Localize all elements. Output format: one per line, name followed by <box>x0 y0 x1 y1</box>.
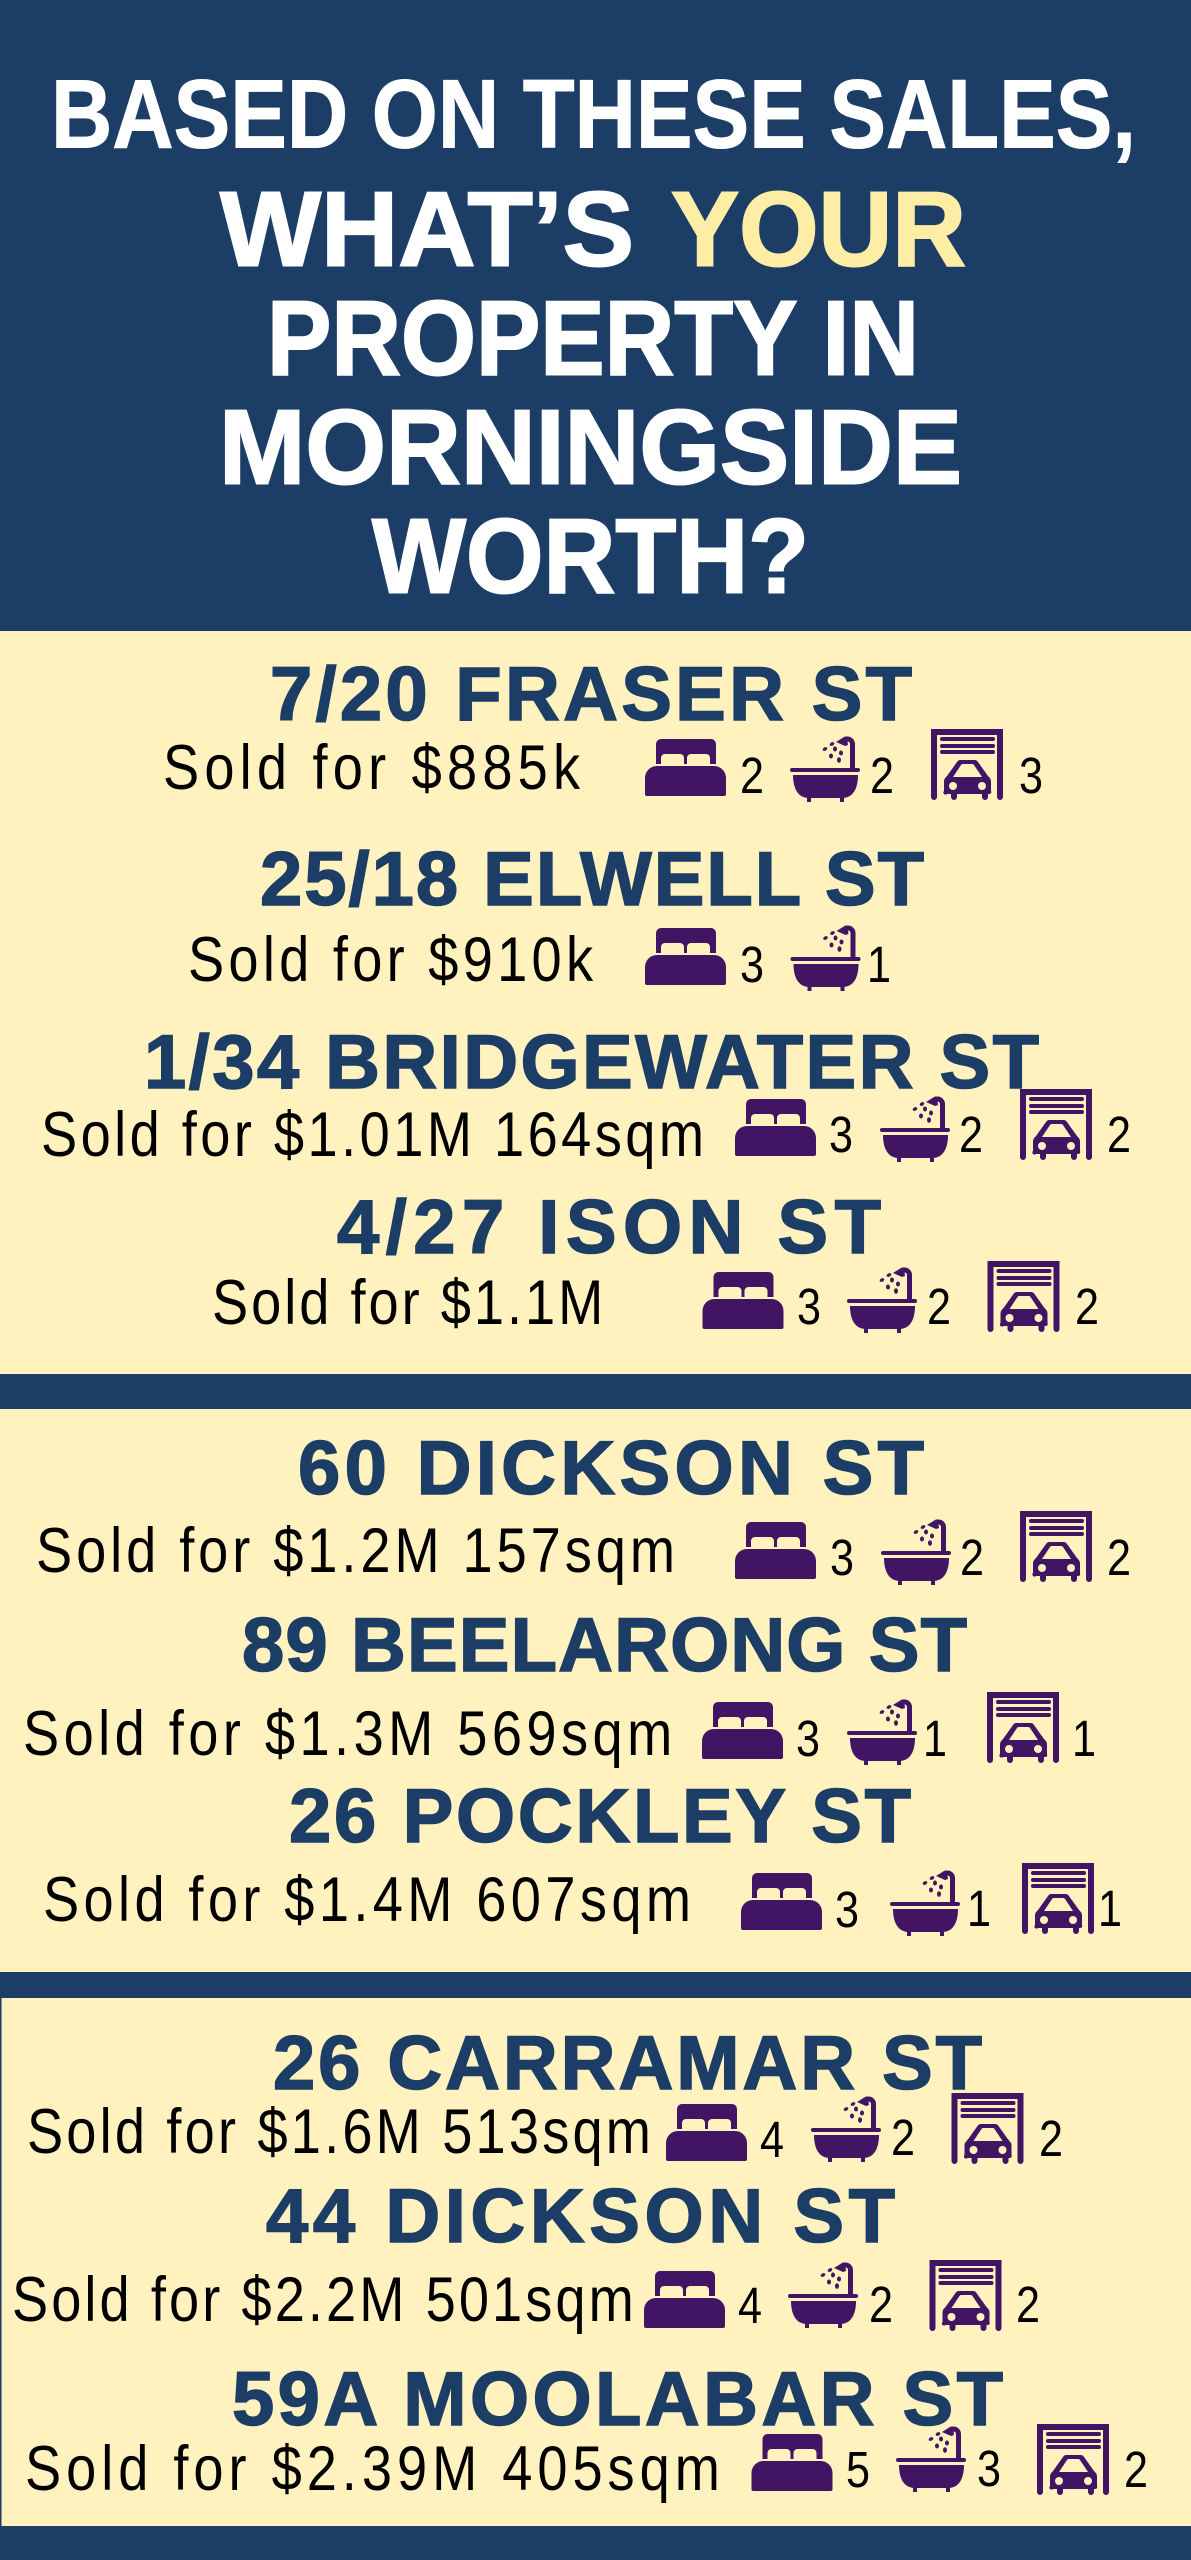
price: Sold for $910k <box>188 925 594 995</box>
baths: 2 <box>870 747 894 804</box>
icon: bed <box>735 1099 816 1156</box>
beds: 3 <box>740 936 764 993</box>
icon: bath <box>811 2097 881 2162</box>
beds: 2 <box>740 747 764 804</box>
car spaces: 2 <box>1107 1529 1131 1586</box>
car spaces: 2 <box>1107 1106 1131 1163</box>
beds: 5 <box>846 2441 870 2498</box>
car spaces: 2 <box>1124 2441 1148 2498</box>
icon: garage <box>1025 1866 1091 1934</box>
car spaces: 1 <box>1072 1710 1096 1767</box>
icon: garage <box>1023 1092 1089 1160</box>
sale row: 26 Pockley St <box>43 1865 1122 1938</box>
sale row: 4/27 Ison St <box>212 1264 1099 1338</box>
address: 7/20 Fraser St: 7/20 FRASER ST <box>270 652 912 737</box>
panel: sales $1.2M to $1.4M <box>0 1409 1191 1972</box>
sale row: 7/20 Fraser St <box>163 732 1043 804</box>
baths: 1 <box>867 936 891 993</box>
baths: 2 <box>959 1106 983 1163</box>
address: 60 Dickson St: 60 DICKSON ST <box>298 1426 924 1511</box>
beds: 4 <box>738 2277 762 2334</box>
car spaces: 3 <box>1019 747 1043 804</box>
address: 59A Moolabar St: 59A MOOLABAR ST <box>232 2357 1003 2442</box>
icon: bed <box>666 2104 747 2161</box>
sale row: 25/18 Elwell St <box>188 925 891 995</box>
address: 44 Dickson St: 44 DICKSON ST <box>266 2174 895 2259</box>
price: Sold for $1.3M 569sqm <box>23 1699 672 1769</box>
sale row: 1/34 Bridgewater St <box>41 1092 1131 1170</box>
price: Sold for $1.4M 607sqm <box>43 1865 691 1935</box>
panel: sales up to $1.1M <box>0 631 1191 1374</box>
icon: bath <box>890 1871 960 1936</box>
address: 4/27 Ison St: 4/27 ISON ST <box>337 1185 881 1270</box>
icon: bath <box>788 2263 858 2328</box>
price: Sold for $2.39M 405sqm <box>25 2434 720 2504</box>
car spaces: 1 <box>1098 1880 1122 1937</box>
icon: garage <box>932 2263 998 2331</box>
address: 26 Pockley St: 26 POCKLEY ST <box>289 1774 911 1859</box>
icon: bath <box>880 1097 950 1162</box>
panel: sales $1.6M and above <box>0 1998 1191 2526</box>
address: 26 Carramar St: 26 CARRAMAR ST <box>273 2021 982 2106</box>
sale row: 89 Beelarong St <box>23 1695 1096 1769</box>
price: Sold for $2.2M 501sqm <box>12 2265 634 2335</box>
title: PROPERTY IN <box>267 280 919 398</box>
icon: bath <box>881 1520 951 1585</box>
icon: bed <box>741 1873 822 1930</box>
icon: bed <box>735 1522 816 1579</box>
beds: 3 <box>796 1710 820 1767</box>
sale row: 59A Moolabar St <box>25 2427 1148 2504</box>
icon: bed <box>702 1702 783 1759</box>
beds: 3 <box>830 1529 854 1586</box>
title: WHAT’S <box>220 170 634 288</box>
baths: 2 <box>927 1278 951 1335</box>
price: Sold for $1.2M 157sqm <box>36 1516 675 1586</box>
price: Sold for $1.01M 164sqm <box>41 1100 704 1170</box>
car spaces: 2 <box>1016 2276 1040 2333</box>
icon: garage <box>990 1695 1056 1763</box>
icon: bed <box>752 2434 832 2491</box>
baths: 2 <box>869 2276 893 2333</box>
baths: 1 <box>923 1710 947 1767</box>
icon: garage <box>1040 2427 1106 2495</box>
title <box>51 60 1136 616</box>
address: 25/18 Elwell St: 25/18 ELWELL ST <box>260 837 924 922</box>
icon: bath <box>896 2427 966 2492</box>
beds: 4 <box>760 2111 784 2168</box>
beds: 3 <box>835 1881 859 1938</box>
address: 89 Beelarong St: 89 BEELARONG ST <box>242 1603 967 1688</box>
sale row: 60 Dickson St <box>36 1514 1131 1586</box>
icon: garage <box>954 2096 1020 2164</box>
icon: garage <box>934 732 1000 800</box>
address: 1/34 Bridgewater St: 1/34 BRIDGEWATER ST <box>144 1020 1039 1105</box>
car spaces: 2 <box>1039 2110 1063 2167</box>
icon: garage <box>990 1264 1056 1332</box>
icon: bed <box>645 739 726 796</box>
title: WORTH? <box>372 498 809 616</box>
icon: bath <box>847 1700 917 1765</box>
sale row: 44 Dickson St <box>12 2263 1040 2335</box>
price: Sold for $885k <box>163 733 581 803</box>
baths: 2 <box>891 2109 915 2166</box>
icon: bed <box>644 2271 725 2328</box>
beds: 3 <box>797 1278 821 1335</box>
baths: 1 <box>967 1880 991 1937</box>
car spaces: 2 <box>1075 1278 1099 1335</box>
price: Sold for $1.6M 513sqm <box>27 2097 651 2167</box>
icon: bath <box>847 1268 917 1333</box>
price: Sold for $1.1M <box>212 1268 603 1338</box>
icon: bath <box>790 926 860 991</box>
title: MORNINGSIDE <box>219 388 962 506</box>
baths: 2 <box>960 1529 984 1586</box>
beds: 3 <box>829 1106 853 1163</box>
icon: bed <box>702 1272 784 1329</box>
title: YOUR <box>671 170 966 288</box>
icon: bath <box>790 737 860 802</box>
sale row: 26 Carramar St <box>27 2096 1063 2168</box>
baths: 3 <box>977 2440 1001 2497</box>
icon: bed <box>645 928 726 985</box>
icon: garage <box>1023 1514 1089 1582</box>
